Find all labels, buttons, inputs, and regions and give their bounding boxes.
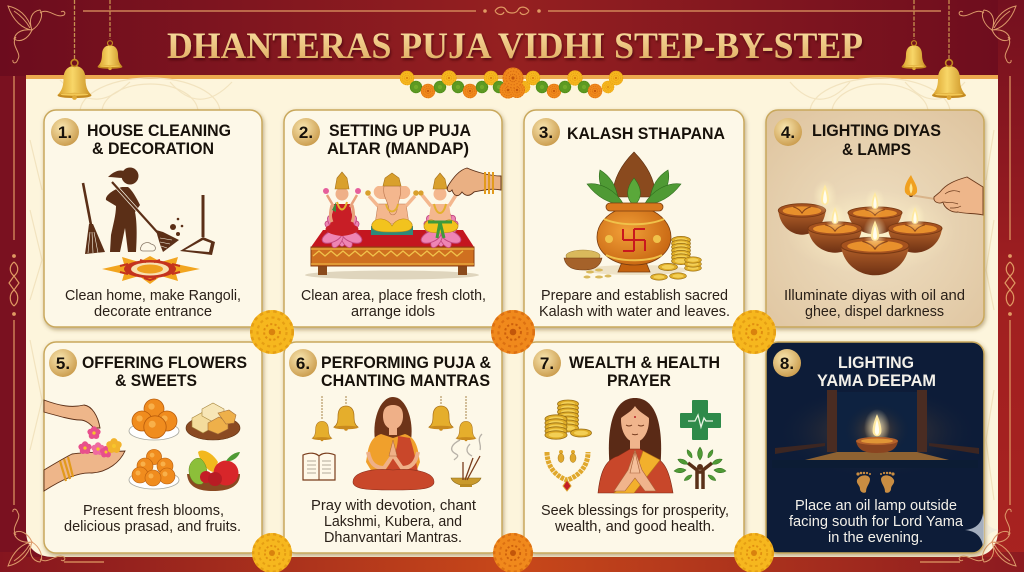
step 4 heading: LIGHTING DIYAS [812,122,941,140]
icon: rangoli [102,256,200,284]
panel: step 1 [44,110,262,327]
panel: step 4 [766,110,984,327]
step 6 heading [321,354,491,390]
deity: Lakshmi [323,172,361,236]
step 6 description: Pray with devotion, chant [311,497,477,514]
step 1 description [65,287,241,320]
cream panel [26,75,998,557]
step 4 badge: 4. [781,123,795,142]
hanging bells left [58,0,122,100]
step 6 description: Lakshmi, Kubera, and [324,513,462,530]
icon: doorway with glowing lamp [772,386,979,478]
step 5 heading [82,354,247,390]
step 2 heading [327,122,471,158]
step 7 heading: PRAYER [607,372,671,390]
title: DHANTERAS PUJA VIDHI STEP-BY-STEP [167,26,863,67]
marigold garland [400,68,623,98]
icon: hand placing idol [447,168,501,196]
step 2 description: arrange idols [351,303,435,320]
icon: tree of health [674,447,726,489]
icon: plate of laddus [129,449,179,489]
step 8 description [789,497,964,546]
step 8 heading [817,354,936,390]
step 5 heading: & SWEETS [115,372,197,390]
step 7 badge: 7. [540,354,554,373]
step 6 description: Dhanvantari Mantras. [324,529,462,546]
step 5 description [64,502,241,535]
icon: incense burner [451,434,482,487]
panel: step 5 [44,342,262,553]
step 4 description: Illuminate diyas with oil and [784,287,965,304]
icon: offering hands with flowers [44,400,125,491]
step 2 description [301,287,486,320]
step 5 description: delicious prasad, and fruits. [64,518,241,535]
icon: plate of fruits [187,450,240,491]
step 8 badge [773,349,801,377]
step 4 badge [774,118,802,146]
step 4 description [784,287,965,320]
icon: person sweeping with broom [83,168,215,255]
step 7 badge [533,349,561,377]
icon: woman praying [598,398,673,493]
step 1 badge [51,118,79,146]
icon: hand with lit match [905,175,983,215]
step 2 badge: 2. [299,123,313,142]
icon: plate of sweets [186,403,240,440]
icon: gold coins [651,236,701,280]
step 2 heading: SETTING UP PUJA [329,122,471,140]
step 1 description: Clean home, make Rangoli, [65,287,241,304]
step 6 badge [289,349,317,377]
icon: green health cross [681,401,720,439]
icon: sparkle watermark [965,513,1000,547]
icon: altar with deities [305,168,501,280]
step 1 badge: 1. [58,123,72,142]
step 7 description [541,502,729,535]
icon: gold coin stacks [545,400,592,439]
step 2 badge [292,118,320,146]
step 3 badge: 3. [539,123,553,142]
step 1 heading [87,122,231,158]
step 3 description: Kalash with water and leaves. [539,303,730,320]
step 2 description: Clean area, place fresh cloth, [301,287,486,304]
panel: step 6 [284,342,502,553]
deity: Ganesha [365,173,419,235]
step 8 badge: 8. [780,354,794,373]
icon: lit diyas [778,180,955,275]
step 8 heading: LIGHTING [838,354,914,372]
step 7 description: wealth, and good health. [554,518,715,535]
step 8 description: Place an oil lamp outside [795,497,957,514]
step 4 heading [812,122,941,159]
step 1 heading: & DECORATION [92,140,214,158]
step 1 heading: HOUSE CLEANING [87,122,231,140]
step 6 badge: 6. [296,354,310,373]
step 5 description: Present fresh blooms, [83,502,224,519]
panel: step 2 [284,110,502,327]
step 4 description: ghee, dispel darkness [805,303,944,320]
step 7 description: Seek blessings for prosperity, [541,502,729,519]
icon: plate of oranges [129,399,179,440]
step 4 heading: & LAMPS [842,141,911,159]
step 5 heading: OFFERING FLOWERS [82,354,247,372]
panel: step 8 [766,342,984,553]
icon: hanging bells [312,396,476,441]
step 3 description [539,287,730,320]
icon: rice bowl [564,250,612,278]
icon: footprints [856,472,895,493]
icon: kalash pot with coconut [584,152,688,275]
step 8 description: in the evening. [828,529,923,546]
step 8 description: facing south for Lord Yama [789,513,964,530]
step 5 badge [49,349,77,377]
step 6 heading: CHANTING MANTRAS [321,372,490,390]
step 2 heading: ALTAR (MANDAP) [327,140,469,158]
step 3 badge [532,118,560,146]
panel: step 7 [524,342,744,553]
step 6 heading: PERFORMING PUJA & [321,354,491,372]
deity: Kubera [418,173,458,238]
step 3 description: Prepare and establish sacred [541,287,728,304]
marigolds between cards [250,310,776,572]
panel: step 3 [524,110,744,327]
step 7 heading [569,354,720,390]
icon: open book [303,453,335,480]
step 5 badge: 5. [56,354,70,373]
step 3 heading: KALASH STHAPANA [567,125,725,143]
icon: gold jewellery [547,450,588,491]
step 1 description: decorate entrance [94,303,212,320]
hanging bells right [902,0,966,100]
step 7 heading: WEALTH & HEALTH [569,354,720,372]
step 8 heading: YAMA DEEPAM [817,372,936,390]
icon: woman praying in meditation [353,397,434,490]
step 6 description [311,497,477,546]
